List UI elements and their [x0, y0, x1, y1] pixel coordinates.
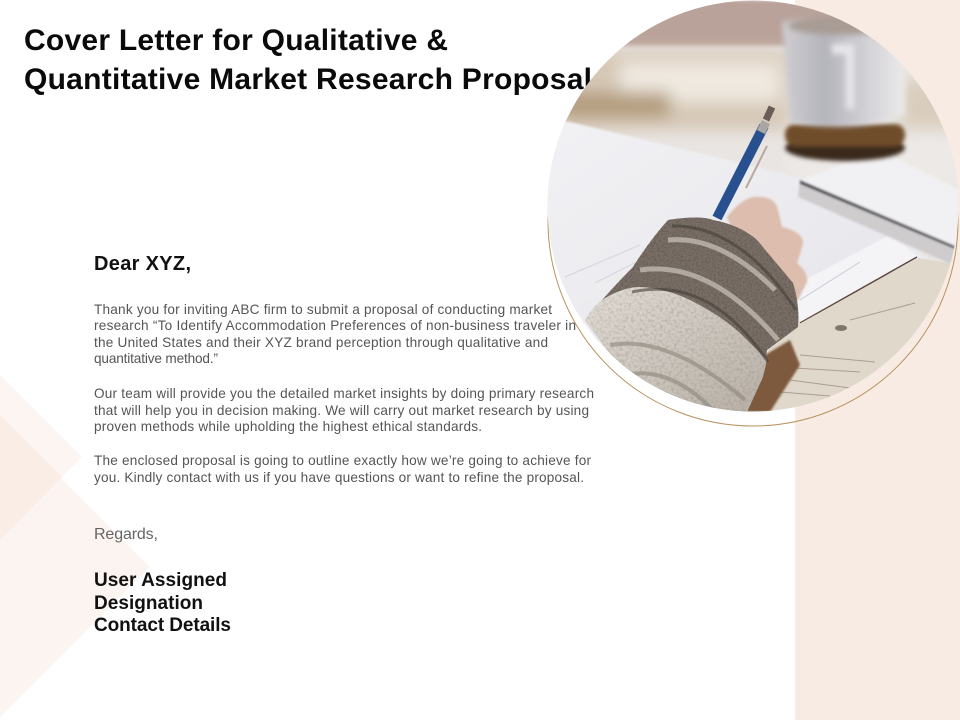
photo hand — [727, 197, 807, 300]
photo notebook — [798, 150, 960, 265]
paragraph 3: you. Kindly contact with us if you have questions or want to refine the proposal. — [94, 470, 584, 485]
paragraph 2: that will help you in decision making. We will carry out market research by using — [94, 403, 589, 418]
photo knit sleeve — [585, 218, 798, 412]
panel: right background band — [795, 0, 960, 720]
photo: hand writing with pen — [540, 0, 960, 412]
signature block — [94, 570, 231, 636]
photo paper edges — [565, 245, 650, 283]
decorative triangles: bottom left — [0, 375, 150, 717]
paragraph 1: the United States and their XYZ brand perception through qualitative and — [94, 335, 548, 350]
photo blurred table — [562, 48, 944, 137]
title: Quantitative Market Research Proposal — [24, 63, 592, 96]
paragraph 1: quantitative method.” — [94, 351, 218, 366]
paragraph 1: research “To Identify Accommodation Preferences of non-business traveler in — [94, 318, 576, 333]
photo pen — [717, 107, 772, 218]
signature block: Designation — [94, 593, 203, 614]
photo background wall — [622, 0, 882, 48]
paragraph 2 — [94, 386, 594, 434]
signature block: User Assigned — [94, 570, 227, 591]
photo coaster — [785, 124, 905, 161]
paragraph 1: Thank you for inviting ABC firm to submit a proposal of conducting market — [94, 302, 552, 317]
gold circle outline — [548, 16, 958, 426]
photo lower paper stack — [795, 235, 917, 322]
paragraph 2: proven methods while upholding the highest ethical standards. — [94, 419, 482, 434]
paragraph 3: The enclosed proposal is going to outline exactly how we’re going to achieve for — [94, 453, 591, 468]
title: Cover Letter for Qualitative & — [24, 24, 448, 57]
paragraph 1 — [94, 302, 576, 366]
photo wooden table — [750, 258, 960, 412]
salutation: Dear XYZ, — [94, 253, 191, 275]
signature block: Contact Details — [94, 615, 231, 636]
paragraph 3 — [94, 453, 591, 485]
title — [24, 24, 592, 96]
paragraph 2: Our team will provide you the detailed market insights by doing primary research — [94, 386, 594, 401]
regards: Regards, — [94, 526, 158, 543]
photo paper sheet — [548, 120, 926, 353]
photo mug — [782, 17, 905, 127]
